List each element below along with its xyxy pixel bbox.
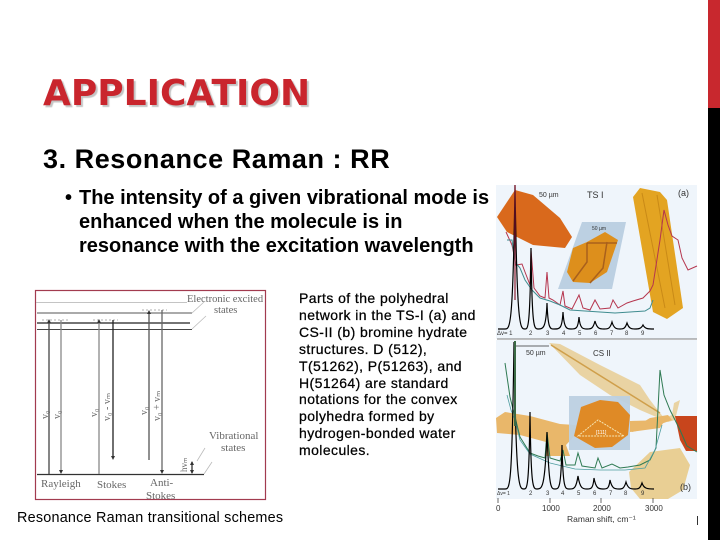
bullet point: enhanced when the molecule is in <box>79 211 402 233</box>
figure panel: CS II crystal spectra: 50 µm <box>526 350 546 357</box>
title: APPLICATION <box>43 73 310 114</box>
figure description: polyhedra formed by <box>299 408 435 424</box>
figure description: network in the TS-I (a) and <box>299 307 476 323</box>
figure panel: CS II crystal spectra: 0 <box>496 504 501 513</box>
figure panel: TS I crystal spectra: (a) <box>678 188 689 198</box>
figure description: H(51264) are standard <box>299 375 449 391</box>
energy level diagram: v₀ - vₘ <box>102 393 113 421</box>
energy level diagram: v₀ + vₘ <box>152 391 163 421</box>
figure panel: TS I crystal spectra: TS I <box>587 190 604 200</box>
figure panel: TS I crystal spectra: 8 <box>625 331 629 337</box>
figure panel: CS II crystal spectra: 6 <box>593 491 597 497</box>
crystal: pale wedge <box>629 448 690 499</box>
figure panel: CS II crystal spectra: 3000 <box>645 504 663 513</box>
energy level diagram: v₀ <box>40 410 51 419</box>
figure panel: CS II crystal spectra: 4 <box>561 491 565 497</box>
figure panel: CS II crystal spectra: (b) <box>680 482 691 492</box>
energy level diagram: v₀ <box>139 406 150 415</box>
figure panel: CS II crystal spectra: 1000 <box>542 504 560 513</box>
figure description: CS-II (b) bromine hydrate <box>299 324 467 340</box>
figure panel: TS I crystal spectra: 5 <box>578 331 582 337</box>
energy level diagram: states <box>214 305 237 316</box>
figure panel: CS II crystal spectra: Δv= 1 <box>497 491 510 497</box>
figure panel: CS II crystal spectra: 2 <box>529 491 533 497</box>
figure panel: CS II crystal spectra: 9 <box>641 491 645 497</box>
energy level diagram: states <box>221 442 245 454</box>
figure panel: TS I crystal spectra: 6 <box>594 331 598 337</box>
figure panel: TS I crystal spectra: 4 <box>562 331 566 337</box>
energy level diagram: Stokes <box>97 479 126 491</box>
crystal: orange <box>497 190 572 248</box>
figure description: hydrogen-bonded water <box>299 425 456 441</box>
figure description <box>299 290 476 458</box>
crystal: long pale feather <box>549 343 680 422</box>
figure panel: TS I crystal spectra: 50 µm <box>539 192 559 199</box>
figure panel: TS I crystal spectra: 2 <box>529 331 533 337</box>
figure panel: CS II crystal spectra: Raman shift, cm⁻¹ <box>567 514 636 524</box>
crystal: yellow <box>633 188 683 319</box>
bullet point: resonance with the excitation wavelength <box>79 235 474 257</box>
figure panel: CS II crystal spectra <box>496 340 698 525</box>
figure description: T(51262), P(51263), and <box>299 358 462 374</box>
bullet point: • <box>65 187 72 209</box>
figure panel: TS I crystal spectra: 3 <box>546 331 550 337</box>
energy level diagram: v₀ <box>89 408 100 417</box>
subheading: 3. Resonance Raman : RR <box>43 144 390 174</box>
figure panel: TS I crystal spectra: Δv= 1 <box>497 331 513 337</box>
figure panel: CS II crystal spectra: [111] <box>596 430 607 436</box>
energy level diagram: Anti- <box>150 477 174 489</box>
figure panel: CS II crystal spectra: 8 <box>624 491 628 497</box>
crystal: centre <box>567 232 618 283</box>
figure panel: TS I crystal spectra: 50 µm <box>592 226 606 232</box>
crystal: red-orange <box>675 416 697 451</box>
figure description: molecules. <box>299 442 370 458</box>
figure description: notations for the convex <box>299 391 458 407</box>
figure panel: CS II crystal spectra: 2000 <box>593 504 611 513</box>
energy level diagram: hvₘ <box>179 457 189 472</box>
figure panel: TS I crystal spectra: 7 <box>610 331 614 337</box>
figure description: structures. D (512), <box>299 341 427 357</box>
figure description: Parts of the polyhedral <box>299 290 449 306</box>
bullet point <box>65 187 489 257</box>
figure panel: CS II crystal spectra: 7 <box>609 491 613 497</box>
energy level diagram: Vibrational <box>209 430 258 442</box>
energy level diagram: Electronic excited <box>187 294 264 305</box>
energy level diagram: v₀ <box>52 410 63 419</box>
figure panel: TS I crystal spectra: 9 <box>641 331 645 337</box>
crystal: centre hexagon <box>574 400 630 448</box>
figure panel: TS I crystal spectra <box>496 185 697 339</box>
figure panel: CS II crystal spectra: 3 <box>546 491 550 497</box>
accent bar: red top and black side <box>708 0 720 540</box>
energy level diagram: Stokes <box>146 490 175 502</box>
figure panel: CS II crystal spectra: 5 <box>577 491 581 497</box>
energy level diagram: Rayleigh <box>41 478 81 490</box>
caption: transitional schemes: Resonance Raman transitional schemes <box>17 510 283 526</box>
figure panel: CS II crystal spectra: CS II <box>593 349 611 358</box>
bullet point: The intensity of a given vibrational mode is <box>79 187 489 209</box>
